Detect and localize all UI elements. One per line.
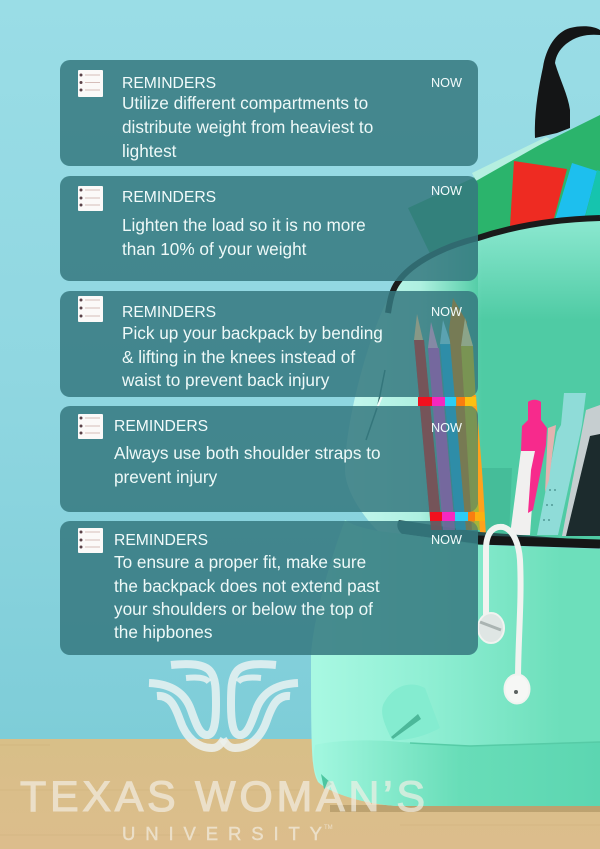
reminder text bbox=[114, 443, 381, 487]
icon: list bbox=[78, 296, 103, 322]
pen bbox=[510, 400, 556, 535]
phone bbox=[562, 405, 600, 536]
reminder text: prevent injury bbox=[114, 467, 218, 487]
logo wordmark bbox=[20, 773, 425, 844]
logo mark bbox=[149, 664, 298, 748]
earphones bbox=[478, 527, 530, 704]
time label: NOW bbox=[431, 184, 462, 198]
backpack photo illustration bbox=[311, 26, 600, 806]
trademark: TM bbox=[324, 825, 333, 831]
panel: reminder 3 bbox=[60, 291, 478, 397]
reminder text: Utilize different compartments to bbox=[122, 93, 368, 113]
reminder text bbox=[122, 93, 373, 161]
reminder text: Always use both shoulder straps to bbox=[114, 443, 381, 463]
pencils seen through card bbox=[430, 521, 478, 530]
fabric tab bbox=[382, 685, 440, 740]
upper zipper bbox=[388, 218, 600, 313]
reminder text: & lifting in the knees instead of bbox=[122, 347, 355, 367]
reminder text: distribute weight from heaviest to bbox=[122, 117, 373, 137]
backpack handle bbox=[535, 26, 600, 138]
green folder bbox=[408, 115, 600, 262]
highlighter bbox=[537, 393, 586, 535]
reminder text bbox=[114, 552, 380, 642]
reminder text bbox=[122, 215, 366, 259]
icon: list bbox=[78, 186, 103, 211]
heading: REMINDERS bbox=[122, 75, 216, 92]
university subtitle: UNIVERSITY bbox=[122, 823, 322, 844]
pencils bbox=[414, 340, 487, 533]
time label: NOW bbox=[431, 533, 462, 547]
time label: NOW bbox=[431, 76, 462, 90]
panel: reminder 5 bbox=[60, 521, 478, 655]
university name: TEXAS WOMAN’S bbox=[20, 773, 425, 821]
reminder text: Pick up your backpack by bending bbox=[122, 323, 383, 343]
reminder text: the backpack does not extend past bbox=[114, 576, 380, 596]
time label: NOW bbox=[431, 305, 462, 319]
reminder text: the hipbones bbox=[114, 622, 212, 642]
panel: reminder 1 bbox=[60, 60, 478, 166]
reminder text: your shoulders or below the top of bbox=[114, 599, 373, 619]
heading: REMINDERS bbox=[114, 418, 208, 435]
icon: list bbox=[78, 414, 103, 439]
reminder text: than 10% of your weight bbox=[122, 239, 307, 259]
pencils seen through card bbox=[420, 406, 478, 512]
reminder text: Lighten the load so it is no more bbox=[122, 215, 366, 235]
lower backpack body bbox=[311, 520, 600, 806]
reminder text: lightest bbox=[122, 141, 177, 161]
time label: NOW bbox=[431, 421, 462, 435]
reminder text: To ensure a proper fit, make sure bbox=[114, 552, 366, 572]
panel: reminder 2 bbox=[60, 176, 478, 281]
panel: reminder 4 bbox=[60, 406, 478, 512]
bottom section bbox=[314, 740, 600, 806]
left crease bbox=[366, 370, 385, 440]
reminder text bbox=[121, 323, 383, 390]
red and blue books bbox=[510, 161, 600, 226]
icon: list bbox=[78, 70, 103, 97]
reminder text: waist to prevent back injury bbox=[121, 370, 330, 390]
pocket back panel bbox=[482, 468, 512, 536]
pocket opening bbox=[397, 520, 600, 548]
heading: REMINDERS bbox=[122, 189, 216, 206]
pencils seen through card bbox=[414, 298, 476, 397]
backpack upper body bbox=[345, 216, 600, 545]
icon: list bbox=[78, 528, 103, 553]
heading: REMINDERS bbox=[122, 304, 216, 321]
heading: REMINDERS bbox=[114, 532, 208, 549]
